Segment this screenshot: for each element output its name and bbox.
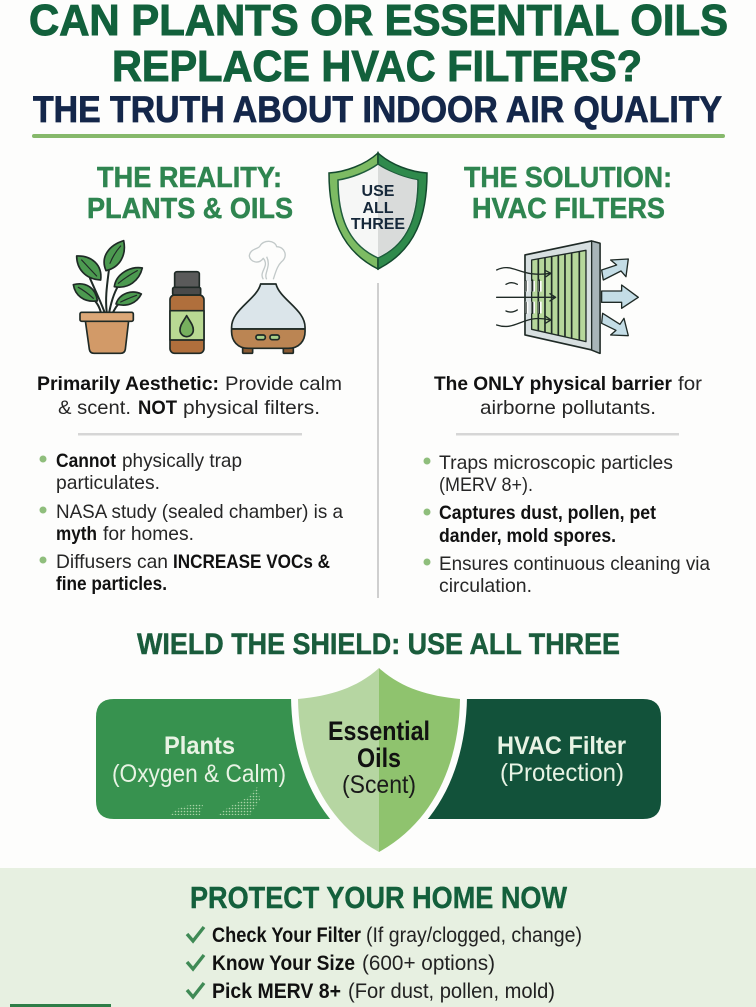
heading: the reality: THE REALITY:: [97, 162, 282, 194]
title underline: [32, 134, 725, 138]
footer tab: [10, 1004, 111, 1007]
panel: protect your home now: (For dust, pollen, mold): [348, 979, 555, 1003]
text: plants summary: [37, 373, 342, 419]
list: plants and oils facts: Diffusers can: [56, 551, 168, 573]
panel: protect your home now: Know Your Size: [212, 951, 355, 975]
icon: essential oil bottle: [170, 272, 204, 353]
list: plants and oils facts: physically trap: [122, 450, 242, 472]
list: filter facts: Traps microscopic particles: [439, 452, 673, 474]
text: plants summary: NOT: [138, 397, 177, 419]
list: filter facts: Captures dust, pollen, pet: [439, 502, 656, 524]
panel: plants: Plants: [164, 732, 235, 760]
heading: the solution: HVAC FILTERS: [472, 193, 665, 225]
list: plants and oils facts: particulates.: [56, 472, 160, 494]
list: filter facts: dander, mold spores.: [439, 525, 616, 547]
list: plants and oils facts: myth: [56, 523, 97, 545]
text: plants summary: physical filters.: [183, 397, 320, 419]
list: plants and oils facts: fine particles.: [56, 573, 167, 595]
heading: the reality: PLANTS & OILS: [87, 193, 293, 225]
panel: hvac filter: HVAC Filter: [497, 732, 626, 760]
shield: essential oils: (Scent): [342, 771, 416, 799]
list: plants and oils facts: Cannot: [56, 450, 116, 472]
panel: protect your home now: Check Your Filter: [212, 923, 362, 947]
icon: use all three shield: [329, 153, 427, 269]
shield: essential oils: Essential: [328, 716, 430, 746]
icon: use all three shield: ALL: [362, 200, 394, 217]
panel: protect your home now: (600+ options): [362, 951, 495, 975]
title: [29, 0, 728, 130]
heading: the solution: [464, 162, 672, 225]
list: plants and oils facts: NASA study (sealed chamber) is a: [56, 501, 343, 523]
panel: protect your home now: PROTECT YOUR HOME NOW: [190, 880, 568, 915]
list: plants and oils facts: for homes.: [103, 523, 194, 545]
panel: plants: [96, 699, 350, 819]
panel: protect your home now: Pick MERV 8+: [212, 979, 341, 1003]
panel: protect your home now: (If gray/clogged, change): [366, 923, 582, 947]
text: plants summary: Provide calm: [225, 373, 342, 395]
text: filter summary: airborne pollutants.: [480, 397, 656, 419]
icon: HVAC filter with airflow: [497, 241, 638, 353]
text: plants summary: & scent.: [58, 397, 131, 419]
list: filter facts: [424, 452, 710, 597]
panel: hvac filter: [410, 699, 661, 819]
heading: the reality: [87, 162, 293, 225]
list: filter facts: (MERV 8+).: [439, 474, 533, 496]
icon: use all three shield: THREE: [351, 216, 405, 233]
icon: potted plant: [73, 241, 142, 353]
heading: the solution: THE SOLUTION:: [464, 162, 672, 194]
panel: protect your home now: [0, 868, 756, 1007]
panel: hvac filter: (Protection): [500, 759, 624, 787]
shield: essential oils: Oils: [357, 743, 401, 773]
text: plants summary: Primarily Aesthetic:: [37, 373, 219, 395]
list: plants and oils facts: [40, 450, 343, 595]
text: filter summary: [434, 373, 703, 419]
title: REPLACE HVAC FILTERS?: [112, 42, 642, 91]
panel: plants: (Oxygen & Calm): [112, 760, 286, 788]
icon: use all three shield: USE: [362, 183, 395, 200]
heading: wield the shield: WIELD THE SHIELD: USE ALL THREE: [137, 628, 620, 661]
shield: essential oils: [291, 662, 467, 858]
list: filter facts: circulation.: [439, 575, 532, 597]
text: filter summary: for: [678, 373, 703, 395]
list: plants and oils facts: INCREASE VOCs &: [173, 551, 330, 573]
icon: aroma diffuser: [232, 241, 305, 353]
text: filter summary: The ONLY physical barrier: [434, 373, 672, 395]
list: filter facts: Ensures continuous cleaning via: [439, 553, 710, 575]
center divider: [377, 283, 379, 598]
